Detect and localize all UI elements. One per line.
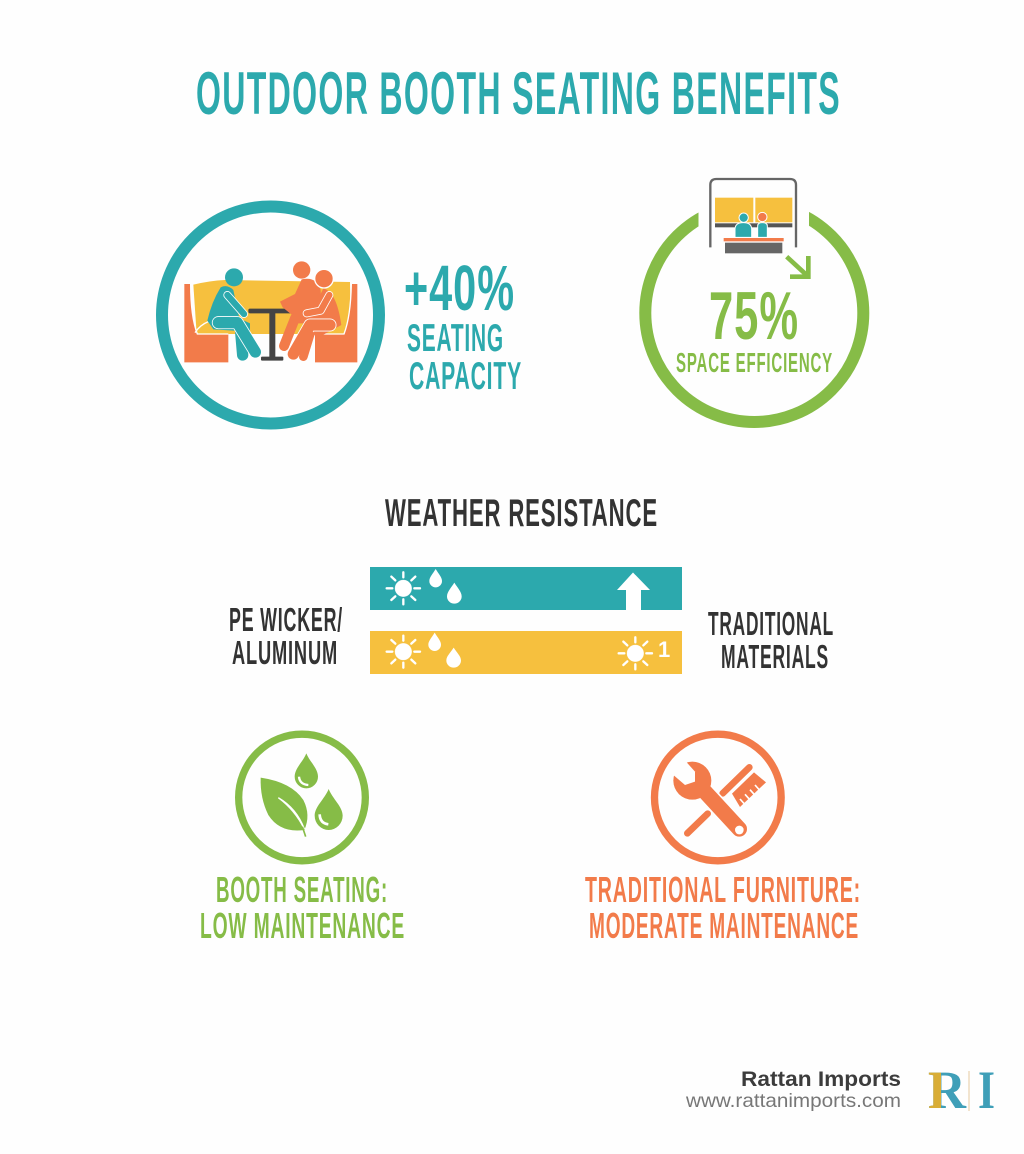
icon: people at booth	[184, 261, 357, 362]
icons: sun and drops	[387, 633, 652, 669]
label: PE wicker / aluminum	[229, 601, 343, 671]
label: traditional materials: TRADITIONAL	[708, 605, 834, 642]
brand name: Rattan Imports	[741, 1067, 901, 1091]
logo: RI monogram	[928, 1071, 994, 1111]
panel: booth seating maintenance	[200, 734, 405, 946]
icon: wrench and brush	[654, 734, 781, 861]
arrow: up	[617, 572, 650, 610]
label: seating capacity: CAPACITY	[409, 355, 522, 398]
green open ring	[645, 180, 863, 422]
bar: traditional materials	[370, 631, 682, 674]
label: traditional materials: MATERIALS	[721, 638, 829, 675]
logo: RI monogram: R	[928, 1060, 967, 1120]
label: space efficiency: SPACE EFFICIENCY	[676, 347, 833, 378]
bar: PE wicker	[370, 567, 682, 610]
label: booth seating low maintenance: LOW MAINTENANCE	[200, 905, 405, 946]
panel: seating capacity	[162, 206, 522, 424]
footer: brand	[686, 1071, 994, 1111]
icon: compact booth with arrow	[710, 179, 808, 277]
website: www.rattanimports.com	[685, 1090, 901, 1112]
logo: RI monogram: R	[928, 1060, 967, 1120]
label: booth seating low maintenance: BOOTH SEATING:	[216, 869, 388, 910]
infographic canvas	[156, 72, 994, 1111]
heading: weather resistance: WEATHER RESISTANCE	[385, 492, 658, 535]
panel: space efficiency	[645, 179, 863, 422]
label: booth seating low maintenance	[200, 869, 405, 946]
stat: +40%: +40%	[404, 252, 515, 324]
teal ring	[162, 206, 379, 424]
rating number: 1	[658, 637, 670, 662]
label: seating capacity	[407, 317, 522, 398]
label: PE wicker / aluminum: ALUMINUM	[232, 634, 338, 671]
label: seating capacity: SEATING	[407, 317, 504, 360]
panel: weather resistance	[229, 492, 834, 675]
panel: traditional furniture maintenance	[585, 734, 861, 946]
logo: RI monogram: I	[978, 1060, 995, 1120]
stat: 75%: 75%	[709, 278, 799, 354]
icon: leaf and water drops	[239, 734, 365, 861]
icons: sun and drops	[387, 569, 462, 604]
label: traditional materials	[708, 605, 834, 675]
label: traditional furniture moderate maintenance	[585, 869, 861, 946]
label: PE wicker / aluminum: PE WICKER/	[229, 601, 343, 638]
